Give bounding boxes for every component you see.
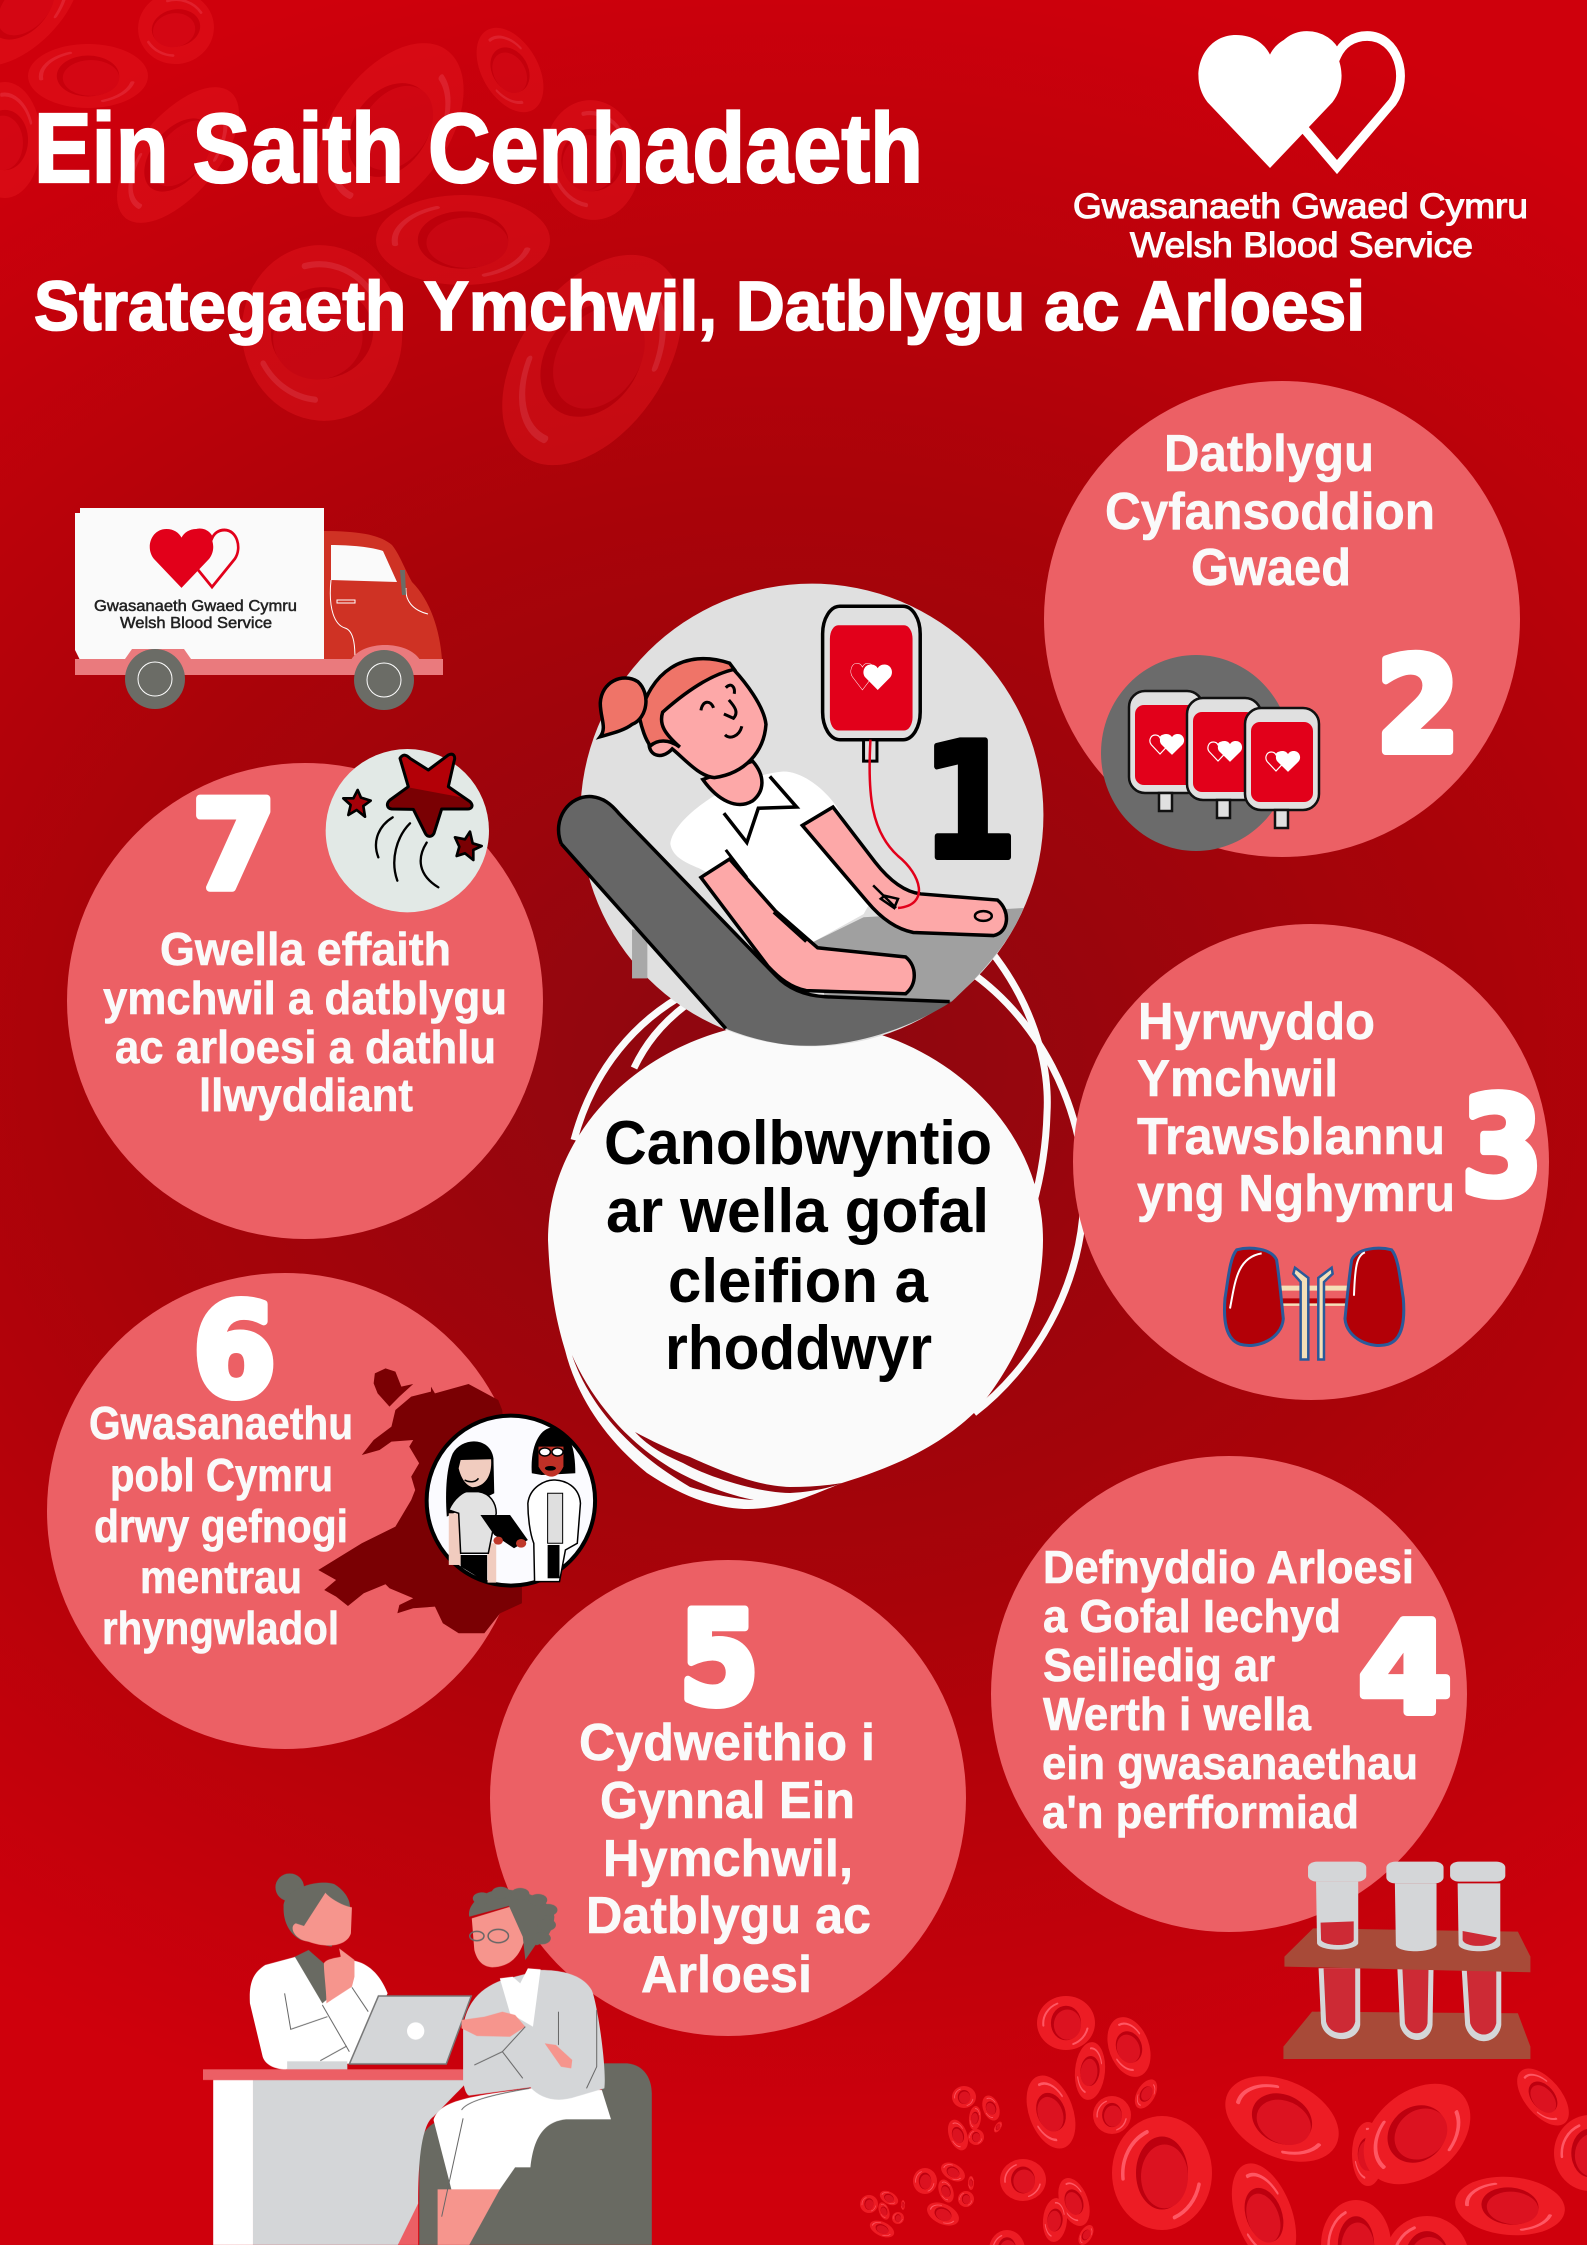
panel 2: blood components: Datblygu [1164, 425, 1374, 483]
panel 6: serving the people of Wales: mentrau [140, 1551, 302, 1603]
panel 6: serving the people of Wales: Gwasanaethu [89, 1397, 353, 1449]
panel 6: serving the people of Wales [47, 1273, 595, 1749]
panel 5: collaboration: Gynnal Ein [600, 1772, 855, 1830]
panel 3: transplant research: 3 [1461, 1069, 1543, 1227]
panel 5: collaboration: Hymchwil, [603, 1830, 853, 1888]
panel 4: innovation and value-based healthcare: Werth i wella [1043, 1688, 1311, 1740]
panel 2: blood components: 2 [1376, 629, 1460, 782]
logo: Welsh Blood Service: Gwasanaeth Gwaed Cymru [1073, 187, 1528, 226]
icon: blood bags [1129, 691, 1319, 828]
panel 5: collaboration: Arloesi [641, 1946, 812, 2004]
panel 4: innovation and value-based healthcare: Seiliedig ar [1043, 1639, 1275, 1691]
panel 3: transplant research [1073, 924, 1549, 1400]
panel 5: collaboration [490, 1560, 966, 2036]
logo: Welsh Blood Service: Welsh Blood Service [1130, 226, 1473, 265]
panel 7: research impact: ac arloesi a dathlu [115, 1021, 496, 1073]
panel 4: innovation and value-based healthcare: a'n perfformiad [1042, 1786, 1359, 1838]
central message text: ar wella gofal [606, 1177, 989, 1246]
blood bag [823, 606, 920, 908]
panel 4: innovation and value-based healthcare: a Gofal Iechyd [1043, 1590, 1341, 1642]
logo: Welsh Blood Service [1073, 35, 1528, 265]
panel 4: innovation and value-based healthcare: ein gwasanaethau [1042, 1737, 1418, 1789]
icon: delivery truck: Welsh Blood Service [120, 615, 272, 632]
panel 7: research impact: ymchwil a datblygu [103, 972, 507, 1024]
decorative blood cells, bottom [860, 1996, 1587, 2245]
panel 2: blood components: Gwaed [1191, 539, 1351, 597]
panel 7: research impact: Gwella effaith [160, 923, 451, 975]
panel 7: research impact: 7 [192, 775, 276, 917]
panel 2: blood components: Cyfansoddion [1105, 483, 1435, 541]
panel 5: collaboration: 5 [679, 1585, 759, 1734]
panel 6: serving the people of Wales: rhyngwladol [102, 1602, 339, 1654]
illustration: two clinicians at desk [203, 1873, 652, 2245]
panel 3: transplant research: Ymchwil [1137, 1050, 1338, 1108]
panel 7: research impact: llwyddiant [199, 1069, 413, 1121]
icon: shooting stars badge [326, 749, 489, 912]
panel 2: blood components [1044, 381, 1520, 857]
central message text: rhoddwyr [665, 1314, 932, 1383]
central message text: Canolbwyntio [604, 1109, 992, 1178]
map of Wales [318, 1368, 522, 1633]
icon: delivery truck [75, 508, 443, 710]
panel 4: innovation and value-based healthcare [991, 1456, 1467, 1932]
panel 4: innovation and value-based healthcare: 4 [1358, 1595, 1452, 1742]
panel 6: serving the people of Wales: pobl Cymru [110, 1449, 333, 1501]
central message text [604, 1109, 992, 1383]
icon: delivery truck: Gwasanaeth Gwaed Cymru [94, 598, 297, 615]
panel 1: donor illustration [559, 584, 1043, 1046]
central panel: white circle with scribble rings [548, 950, 1084, 1509]
central message text: cleifion a [668, 1247, 928, 1316]
panel 4: innovation and value-based healthcare: Defnyddio Arloesi [1043, 1541, 1414, 1593]
panel 3: transplant research: yng Nghymru [1137, 1165, 1455, 1223]
icon: two clinicians badge [427, 1416, 595, 1586]
panel 3: transplant research: Hyrwyddo [1138, 993, 1375, 1051]
icon: test tubes in rack [1283, 1862, 1530, 2059]
subtitle: Strategaeth Ymchwil, Datblygu ac Arloesi [34, 267, 1365, 345]
panel 6: serving the people of Wales: drwy gefnogi [94, 1500, 348, 1552]
number 1: 1 [921, 708, 1018, 895]
panel 3: transplant research: Trawsblannu [1137, 1108, 1445, 1166]
panel 7: research impact [67, 749, 543, 1239]
panel 5: collaboration: Cydweithio i [579, 1714, 875, 1772]
panel 6: serving the people of Wales: 6 [193, 1277, 276, 1426]
panel 5: collaboration: Datblygu ac [586, 1887, 871, 1945]
decorative blood cells, top [0, 0, 719, 498]
icon: kidneys [1224, 1248, 1404, 1360]
title: Ein Saith Cenhadaeth [34, 93, 923, 203]
